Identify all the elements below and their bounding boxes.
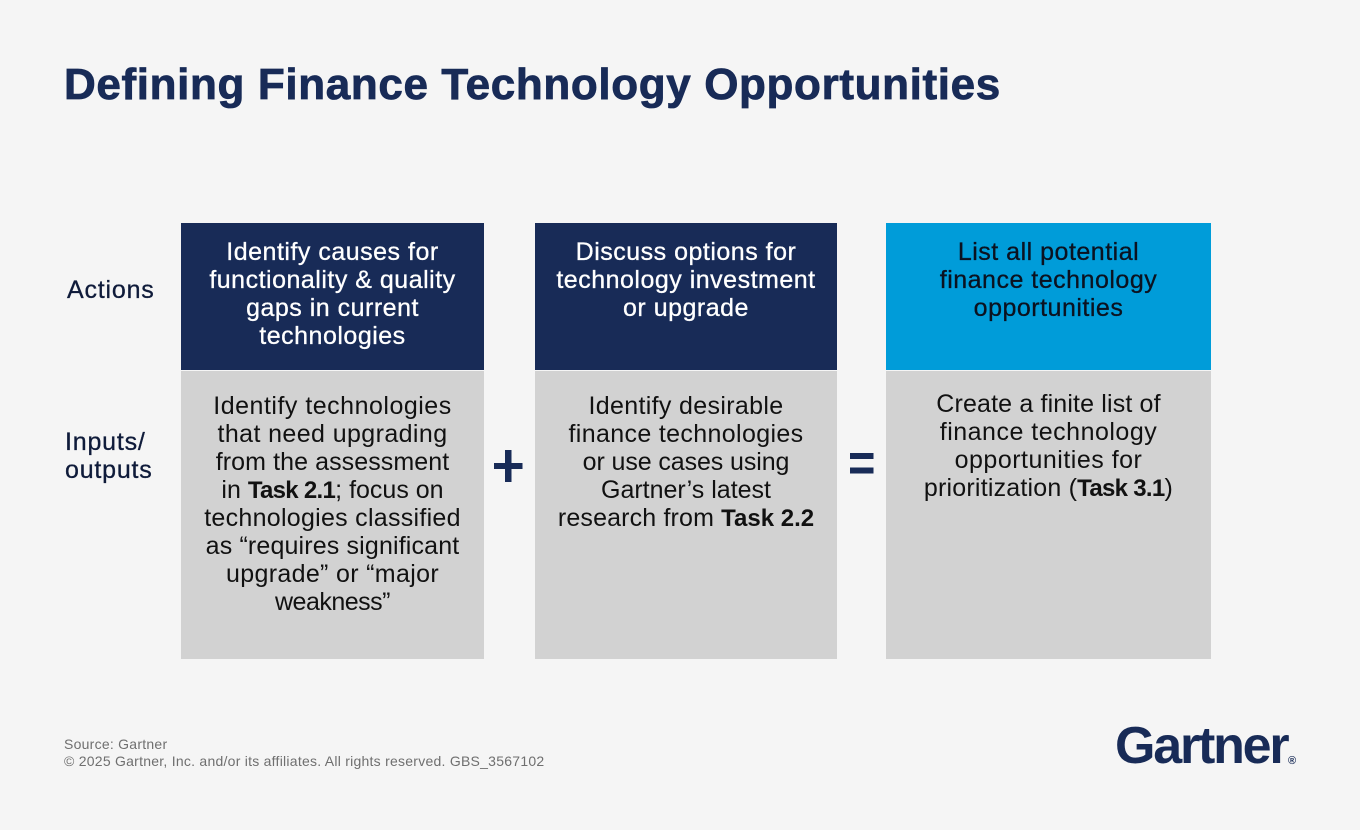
action box 3: finance technology [940,266,1157,294]
action box 1: functionality & quality [209,266,456,294]
action box 3: opportunities [974,294,1123,322]
action box 3 [886,223,1211,370]
input box 2: finance technologies [569,420,803,448]
action box 1: technologies [259,322,406,350]
row label: inputs/outputs [65,428,153,484]
output box 3: opportunities for [955,446,1142,474]
input box 1 [181,371,484,659]
input box 2 [535,371,837,659]
action box 2: technology investment [556,266,816,294]
action box 1: gaps in current [246,294,419,322]
input box 1: weakness” [275,588,390,616]
input box 1: Identify technologies [213,392,452,420]
equals sign [850,453,874,474]
output box 3: prioritization (Task 3.1) [924,474,1173,502]
row label: inputs/outputs: outputs [65,456,153,484]
title: Defining Finance Technology Opportunities [64,60,1001,109]
action box 2 [535,223,837,370]
source note: © 2025 Gartner, Inc. and/or its affiliates. All rights reserved. GBS_3567102 [64,753,544,769]
source note: Source: Gartner [64,736,167,752]
action box 3: List all potential [958,238,1139,266]
action box 2: or upgrade [623,294,749,322]
source note [64,736,544,769]
input box 2: or use cases using [583,448,789,476]
action box 1 [181,223,484,370]
plus sign [494,450,522,482]
row label: actions: Actions [67,276,155,304]
input box 2: Identify desirable [589,392,783,420]
output box 3 [886,371,1211,659]
output box 3: finance technology [940,418,1157,446]
input box 1: that need upgrading [217,420,448,448]
input box 1: as “requires significant [206,532,459,560]
row label: inputs/outputs: Inputs/ [65,428,146,456]
input box 1: in Task 2.1; focus on [221,476,444,504]
action box 2: Discuss options for [576,238,796,266]
input box 1: upgrade” or “major [226,560,439,588]
input box 2: Gartner’s latest [601,476,771,504]
action box 1: Identify causes for [226,238,439,266]
input box 1: from the assessment [216,448,449,476]
logo: ® [1288,755,1296,767]
input box 2: research from Task 2.2 [558,504,814,532]
logo: Gartner [1115,717,1287,775]
output box 3: Create a finite list of [936,390,1161,418]
input box 1: technologies classified [204,504,461,532]
